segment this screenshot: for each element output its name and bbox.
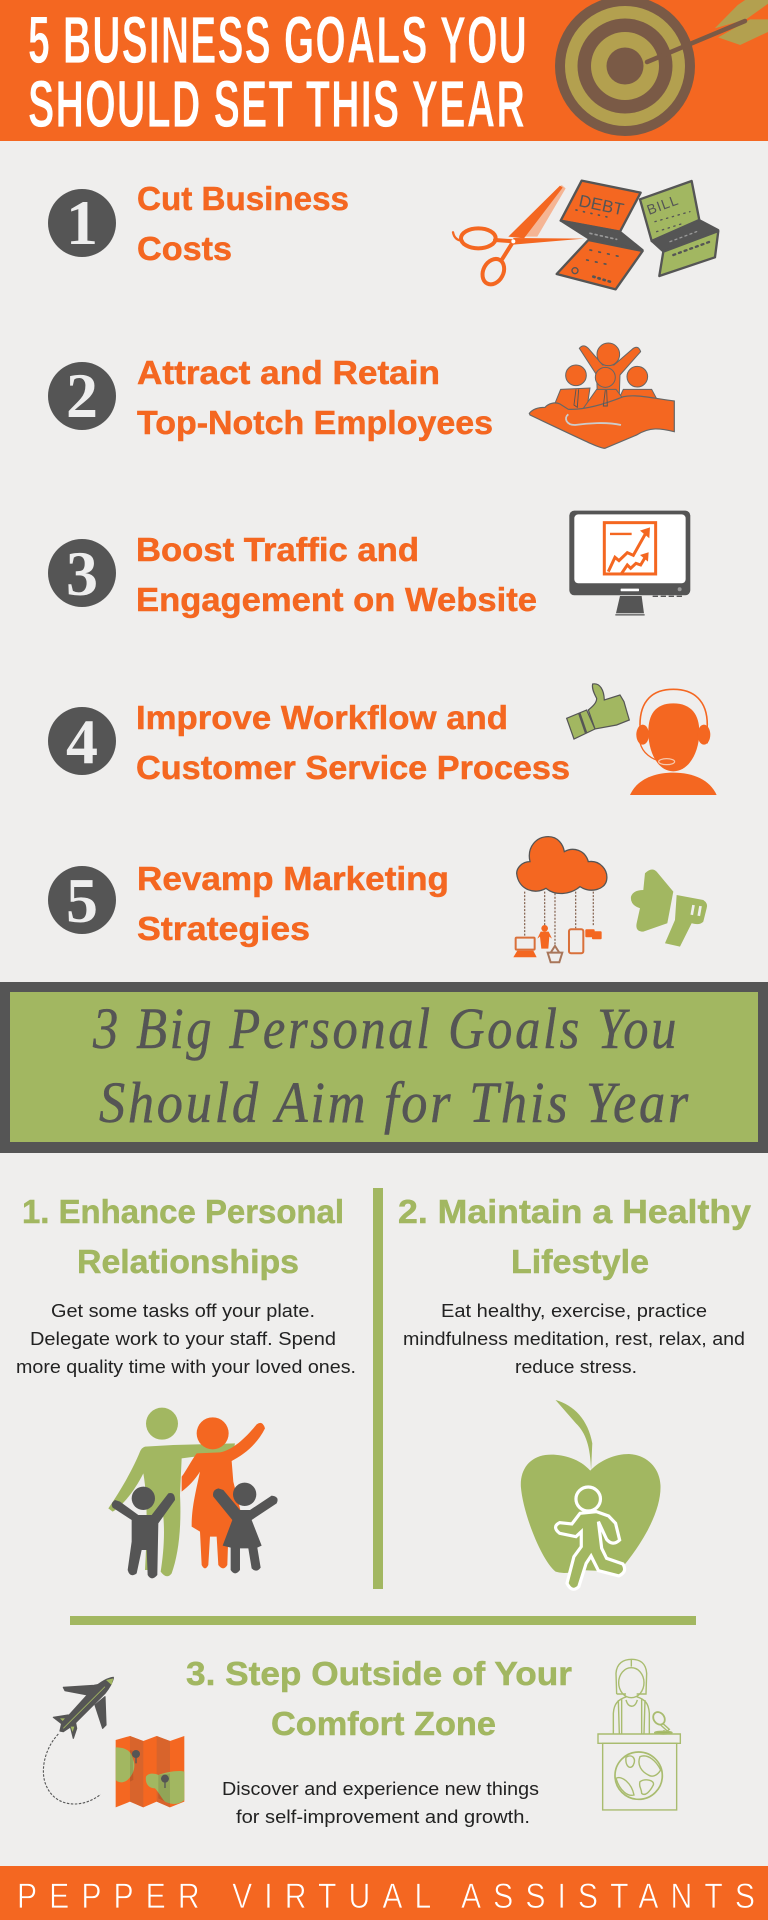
goal 5 heading: [137, 861, 449, 948]
number badge 2: 2: [66, 360, 98, 431]
title: [28, 3, 528, 142]
number badge 4: 4: [66, 706, 98, 777]
goal 1 heading: [137, 181, 349, 268]
icon: monitor with growth chart: [569, 511, 690, 616]
number badge 5: 5: [66, 865, 98, 936]
dividers: [70, 1188, 696, 1625]
goal 3 heading: Engagement on Website: [136, 582, 537, 619]
goal 3: [48, 511, 690, 619]
header banner: [0, 0, 768, 142]
goal 1: [48, 181, 718, 289]
goal 4 heading: Customer Service Process: [136, 750, 570, 787]
footer band: [0, 1866, 768, 1920]
personal goal 3 text: Discover and experience new things: [222, 1778, 539, 1799]
number badge 5: [48, 865, 116, 936]
goal 2 heading: [137, 355, 493, 442]
personal goal 2 text: mindfulness meditation, rest, relax, and: [403, 1328, 745, 1349]
icon: thumbs up: [567, 684, 629, 739]
icon: apple with runner: [521, 1400, 661, 1589]
personal goal 3 text: [222, 1778, 539, 1827]
goal 1 heading: Costs: [137, 231, 232, 268]
goal 5: [48, 837, 707, 962]
number badge 3: [48, 538, 116, 609]
icon: megaphone: [631, 870, 707, 947]
personal goal 1 text: [16, 1300, 356, 1377]
personal goal 1 heading: [22, 1194, 344, 1281]
personal goal 3 text: for self-improvement and growth.: [236, 1806, 530, 1827]
personal goal 2 text: Eat healthy, exercise, practice: [441, 1300, 707, 1321]
personal goal 1: [16, 1194, 356, 1578]
banner heading: 3 Big Personal Goals You: [92, 996, 679, 1061]
goal 4: [48, 684, 717, 795]
number badge 1: 1: [66, 187, 98, 258]
goal 5 heading: Strategies: [137, 911, 310, 948]
banner heading: Should Aim for This Year: [99, 1070, 691, 1135]
goal 2: [48, 343, 674, 448]
goal 4 heading: Improve Workflow and: [136, 700, 508, 737]
banner heading: [92, 996, 691, 1135]
personal goal 2 text: reduce stress.: [515, 1356, 637, 1377]
goal 2 heading: Attract and Retain: [137, 355, 440, 392]
number badge 1: [48, 187, 116, 258]
personal goal 1 text: Delegate work to your staff. Spend: [30, 1328, 336, 1349]
icon: scissors cutting debt and bill: BILL: [645, 192, 681, 218]
personal goal 3 heading: Comfort Zone: [271, 1706, 496, 1743]
icon: scissors cutting debt and bill: DEBT: [577, 191, 625, 219]
goal 3 heading: Boost Traffic and: [136, 532, 419, 569]
personal goal 2 heading: 2. Maintain a Healthy: [398, 1194, 751, 1231]
goal 3 heading: [136, 532, 537, 619]
icon: folded map with pins: [116, 1736, 184, 1807]
number badge 4: [48, 706, 116, 777]
icon: team held in a hand: [529, 343, 674, 448]
personal goal 2 text: [403, 1300, 745, 1377]
goal 1 heading: Cut Business: [137, 181, 349, 218]
number badge 3: 3: [66, 538, 98, 609]
personal goal 1 text: more quality time with your loved ones.: [16, 1356, 356, 1377]
personal goal 2: [398, 1194, 751, 1589]
number badge 2: [48, 360, 116, 431]
icon: family: [108, 1408, 278, 1578]
personal goal 2 heading: [398, 1194, 751, 1281]
goal 2 heading: Top-Notch Employees: [137, 405, 493, 442]
personal goal 1 heading: 1. Enhance Personal: [22, 1194, 344, 1231]
icon: target and arrow: [555, 0, 768, 136]
goal 4 heading: [136, 700, 570, 787]
icon: marketing cloud with hanging devices: [513, 837, 607, 962]
personal goal 3 heading: [186, 1656, 572, 1743]
personal goal 3: [43, 1656, 680, 1827]
icon: airplane with dashed route: [43, 1677, 113, 1804]
personal goal 3 heading: 3. Step Outside of Your: [186, 1656, 572, 1693]
personal goals banner: [0, 982, 768, 1153]
icon: customer service agent with headset: [630, 689, 717, 795]
icon: scissors cutting debt and bill: [453, 181, 718, 289]
goal 5 heading: Revamp Marketing: [137, 861, 449, 898]
personal goal 1 text: Get some tasks off your plate.: [51, 1300, 315, 1321]
personal goal 1 heading: Relationships: [77, 1244, 299, 1281]
personal goal 2 heading: Lifestyle: [511, 1244, 649, 1281]
icon: speaker at podium with globe: [598, 1659, 680, 1810]
